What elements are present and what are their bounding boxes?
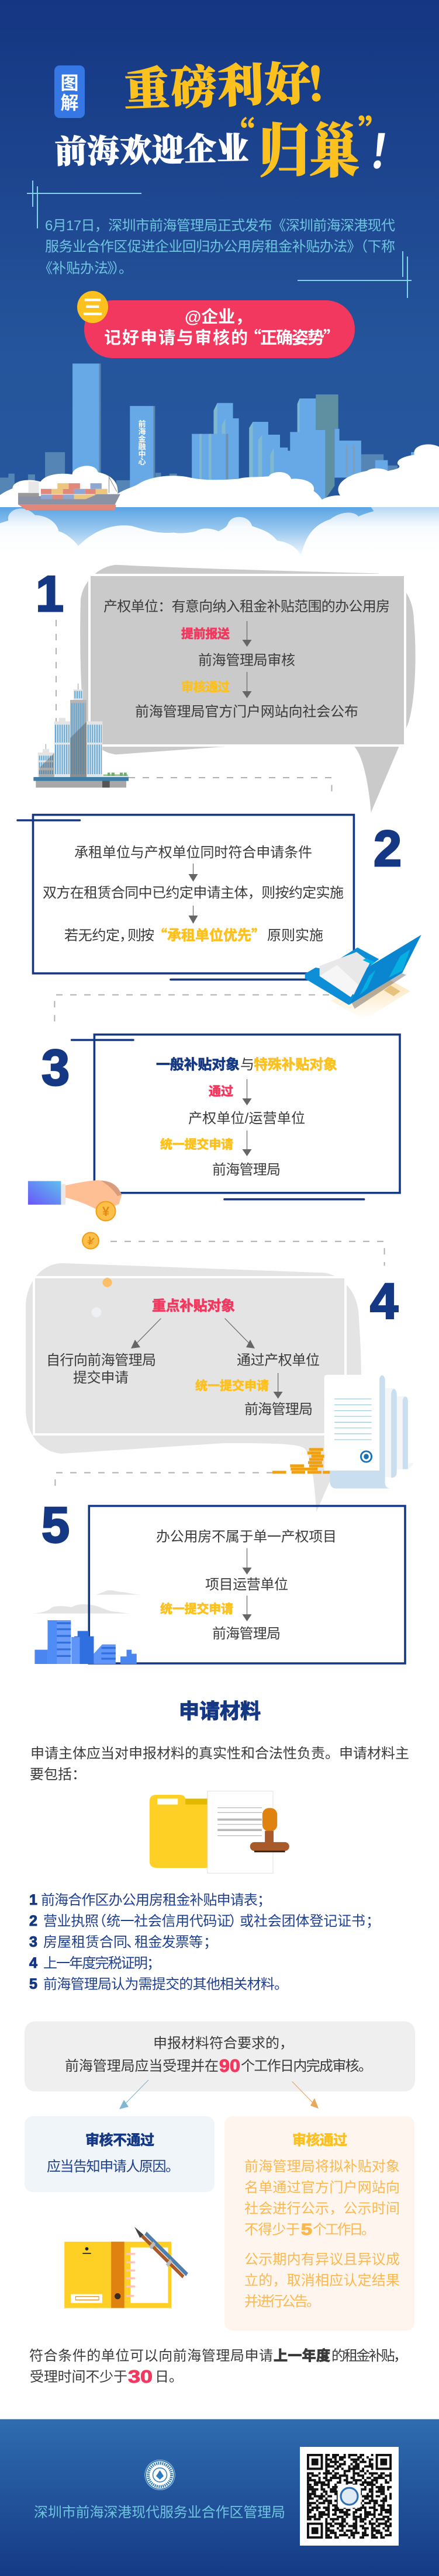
card 2: ， bbox=[119, 928, 133, 944]
section heading: 申请材料: 申请材料 bbox=[179, 1700, 261, 1723]
materials list: 上一年度完税证明； bbox=[43, 1956, 161, 1971]
panel: review not passed: 审核不通过 bbox=[85, 2133, 154, 2148]
panel: review passed: 立的，取消相应认定结果 bbox=[244, 2273, 400, 2289]
intro paragraph: 。 bbox=[119, 261, 133, 276]
card 4 inner panel bbox=[34, 1277, 345, 1434]
title line 1: 重磅利好 bbox=[123, 47, 312, 119]
title highlight: 归巢: “ bbox=[220, 107, 255, 158]
panel: review passed: 不得少于 bbox=[244, 2222, 300, 2238]
materials list: 租金发票等 bbox=[134, 1934, 203, 1950]
title highlight: 归巢: ” bbox=[358, 105, 393, 156]
card 2: “承租单位优先” bbox=[153, 924, 265, 944]
closing note: 上一年度 bbox=[274, 2348, 330, 2364]
card 5: 办公用房不属于单一产权项目 bbox=[156, 1529, 337, 1545]
arrow: to not passed bbox=[119, 2080, 148, 2109]
card 3 bbox=[72, 1035, 400, 1199]
card 1: speech bubble: 前海管理局官方门户网站向社会公布 bbox=[135, 704, 358, 720]
card 4: speech bubble: 通过产权单位 bbox=[237, 1353, 320, 1368]
connector 1 to 2 bbox=[56, 620, 332, 796]
footer organisation name: 深圳市前海深港现代服务业合作区管理局 bbox=[34, 2505, 285, 2520]
card 2: 双方在租赁合同中已约定申请主体，则按约定实施 bbox=[43, 885, 344, 901]
card 2: 原则实施 bbox=[267, 928, 323, 944]
skyline tower label: 融 bbox=[138, 442, 146, 451]
closing note: 受理时间不少于 bbox=[30, 2369, 127, 2385]
review notice box: 前海管理局应当受理并在 bbox=[65, 2058, 219, 2074]
materials list: 房屋租赁合同 bbox=[43, 1934, 127, 1950]
number 1: 1 bbox=[36, 566, 64, 622]
icon: notebook and pen bbox=[64, 2227, 187, 2308]
card 1: speech bubble bbox=[80, 565, 416, 813]
card 3: 通过 bbox=[209, 1085, 233, 1098]
card 5: 统一提交申请 bbox=[160, 1602, 233, 1616]
pill heading bbox=[77, 291, 355, 358]
materials list: 5 bbox=[29, 1976, 37, 1992]
panel: review passed: 社会进行公示，公示时间 bbox=[244, 2201, 400, 2217]
frame corner bottom-right bbox=[298, 251, 412, 298]
number 4: 4 bbox=[370, 1274, 398, 1330]
number 5: 5 bbox=[42, 1497, 70, 1553]
clouds behind card 5 bbox=[32, 1590, 141, 1614]
panel: review passed bbox=[224, 2116, 414, 2331]
panel: review passed: 并进行公告。 bbox=[244, 2294, 320, 2310]
intro paragraph: 补贴办法 bbox=[52, 261, 108, 276]
card 4 outer bubble bbox=[26, 1263, 361, 1512]
card 3: 一般补贴对象 bbox=[156, 1057, 240, 1073]
lower clouds bbox=[0, 507, 439, 571]
skyline tower label: 前 bbox=[138, 419, 146, 428]
card 4: speech bubble bbox=[26, 1263, 361, 1512]
title highlight: 归巢 bbox=[220, 105, 415, 188]
number 3: 3 bbox=[42, 1040, 70, 1096]
pill heading: 记好申请与审核的 bbox=[104, 328, 248, 348]
icon: folder with stamp bbox=[150, 1791, 289, 1873]
skyline tower label: 心 bbox=[138, 457, 146, 466]
card 1: speech bubble: 审核通过 bbox=[181, 680, 230, 694]
card 1: speech bubble: 产权单位：有意向纳入租金补贴范围的办公用房 bbox=[103, 599, 390, 615]
closing note: 日。 bbox=[155, 2369, 183, 2385]
footer band bbox=[0, 2419, 439, 2576]
materials list: 4 bbox=[29, 1955, 37, 1971]
panel: review not passed: 应当告知申请人原因。 bbox=[47, 2159, 179, 2175]
arrow bbox=[242, 621, 251, 647]
materials intro: 要包括： bbox=[30, 1767, 86, 1783]
badge: number three bbox=[77, 291, 108, 323]
footer emblem bbox=[145, 2460, 175, 2490]
coin: ¥ bbox=[85, 1235, 95, 1249]
pill heading: @企业， bbox=[185, 307, 252, 327]
closing note: 30 bbox=[128, 2366, 153, 2387]
arrow bbox=[242, 672, 251, 698]
badge: 图解: 解 bbox=[61, 93, 78, 113]
materials list bbox=[29, 1892, 380, 1992]
materials intro bbox=[30, 1746, 409, 1783]
intro paragraph: 《 bbox=[39, 261, 53, 276]
skyline bbox=[0, 363, 416, 502]
icon: hand with coin: ¥ bbox=[102, 1204, 110, 1219]
materials list: 前海管理局认为需提交的其他相关材料。 bbox=[43, 1977, 288, 1992]
icon: hand with coin bbox=[28, 1180, 122, 1221]
arrow bbox=[188, 906, 198, 924]
arrow bbox=[274, 1373, 283, 1399]
title highlight: 归巢: 归巢 bbox=[259, 105, 360, 188]
sea gradient bbox=[0, 507, 439, 573]
card 5: 项目运营单位 bbox=[205, 1577, 288, 1593]
review notice box bbox=[25, 2022, 415, 2092]
materials list: 、 bbox=[126, 1934, 140, 1950]
sky background bbox=[0, 0, 439, 507]
card 3: 统一提交申请 bbox=[160, 1138, 233, 1152]
title highlight: 归巢: ！ bbox=[365, 114, 415, 182]
intro paragraph: 》 bbox=[107, 261, 121, 276]
card 4: speech bubble: 统一提交申请 bbox=[195, 1379, 269, 1393]
intro paragraph bbox=[39, 218, 395, 276]
skyline tower label: 海 bbox=[138, 427, 146, 436]
QR code bbox=[300, 2447, 399, 2546]
closing note: 的租金补贴， bbox=[331, 2348, 407, 2364]
review notice box: 个工作日内完成审核。 bbox=[241, 2058, 372, 2074]
materials list: 统一社会信用代码证 bbox=[106, 1913, 231, 1929]
materials list: 营业执照 bbox=[43, 1913, 99, 1929]
card 5: 前海管理局 bbox=[212, 1626, 281, 1642]
badge: 图解: 图 bbox=[61, 73, 78, 93]
card 3: 与 bbox=[240, 1057, 254, 1073]
arrow bbox=[242, 1131, 251, 1156]
panel: review passed: 公示期内有异议且异议成 bbox=[244, 2252, 400, 2268]
badge: 图解 bbox=[54, 65, 85, 118]
materials intro: 申请主体应当对申报材料的真实性和合法性负责。申请材料主 bbox=[30, 1746, 409, 1762]
icon: coin stacks and document bbox=[272, 1375, 414, 1489]
card 4: speech bubble: 自行向前海管理局 bbox=[46, 1353, 156, 1368]
intro paragraph: 6月17日，深圳市前海管理局正式发布《深圳前海深港现代 bbox=[45, 218, 395, 234]
closing note: 符合条件的单位可以向前海管理局申请 bbox=[29, 2348, 273, 2364]
arrow bbox=[242, 1079, 251, 1105]
connector 3 to 4 bbox=[110, 1242, 385, 1266]
panel: review passed: 审核通过 bbox=[292, 2133, 347, 2148]
upper clouds bbox=[0, 445, 439, 507]
arrow bbox=[225, 1318, 255, 1348]
closing note bbox=[29, 2348, 407, 2387]
card 4: speech bubble: 前海管理局 bbox=[244, 1402, 313, 1417]
arrow bbox=[131, 1318, 161, 1348]
materials list: ； bbox=[203, 1934, 217, 1950]
card 3: 前海管理局 bbox=[212, 1162, 281, 1178]
arrow bbox=[242, 1548, 251, 1575]
number 2: 2 bbox=[374, 821, 402, 877]
card 5 bbox=[89, 1506, 405, 1663]
badge: number three: 三 bbox=[82, 295, 103, 319]
skyline tower label: 金 bbox=[138, 435, 146, 443]
icon: office buildings bbox=[33, 684, 129, 788]
card 1: speech bubble: 前海管理局审核 bbox=[198, 653, 295, 668]
materials list: 2 bbox=[29, 1913, 37, 1929]
panel: review not passed bbox=[25, 2116, 215, 2192]
materials list: 3 bbox=[29, 1934, 37, 1950]
card 2 bbox=[18, 815, 354, 980]
card 1 inner panel bbox=[89, 575, 405, 746]
materials list: ） bbox=[229, 1913, 243, 1929]
ship bbox=[18, 476, 120, 510]
review notice box: 90 bbox=[219, 2055, 240, 2076]
card 1: speech bubble: 提前报送 bbox=[181, 627, 230, 641]
materials list: ； bbox=[366, 1913, 380, 1929]
panel: review passed: 名单通过官方门户网站向 bbox=[244, 2180, 400, 2196]
panel: review passed: 前海管理局将拟补贴对象 bbox=[244, 2159, 400, 2175]
card 4: speech bubble: 提交申请 bbox=[73, 1370, 129, 1386]
panel: review passed: 个工作日。 bbox=[313, 2222, 375, 2238]
frame corner top-left bbox=[27, 181, 141, 228]
panel: review passed: 5 bbox=[301, 2220, 312, 2238]
connector 4 to 5 bbox=[55, 1473, 273, 1488]
card 2: 则按 bbox=[127, 928, 154, 944]
materials list: 1 bbox=[29, 1892, 37, 1908]
arrow bbox=[188, 864, 198, 882]
intro paragraph: 服务业合作区促进企业回归办公用房租金补贴办法》（下称 bbox=[45, 239, 395, 255]
materials list: （ bbox=[92, 1913, 106, 1929]
title line 1: ！ bbox=[303, 48, 351, 115]
arrow: to passed bbox=[292, 2082, 319, 2109]
materials list: 前海合作区办公用房租金补贴申请表； bbox=[41, 1892, 271, 1908]
card 3: 产权单位/运营单位 bbox=[188, 1111, 305, 1126]
card 1 outer bubble bbox=[80, 565, 416, 813]
review notice box: 申报材料符合要求的， bbox=[153, 2036, 293, 2051]
pill heading: “正确姿势” bbox=[244, 324, 340, 349]
coin bbox=[82, 1233, 99, 1249]
icon: blue city bbox=[34, 1620, 137, 1664]
materials list: 或社会团体登记证书 bbox=[240, 1913, 365, 1929]
icon: blue folder bbox=[305, 935, 421, 1020]
title line 2: 前海欢迎企业 bbox=[54, 123, 249, 172]
card 2: 若无约定 bbox=[64, 928, 120, 944]
card 3: 特殊补贴对象 bbox=[254, 1057, 337, 1073]
card 4: speech bubble: 重点补贴对象 bbox=[152, 1298, 235, 1314]
connector 2 to 3 bbox=[54, 995, 329, 1023]
intro paragraph: ） bbox=[112, 261, 126, 276]
card 2: 承租单位与产权单位同时符合申请条件 bbox=[74, 845, 312, 861]
skyline tower label: 中 bbox=[138, 450, 146, 459]
arrow bbox=[242, 1596, 251, 1621]
